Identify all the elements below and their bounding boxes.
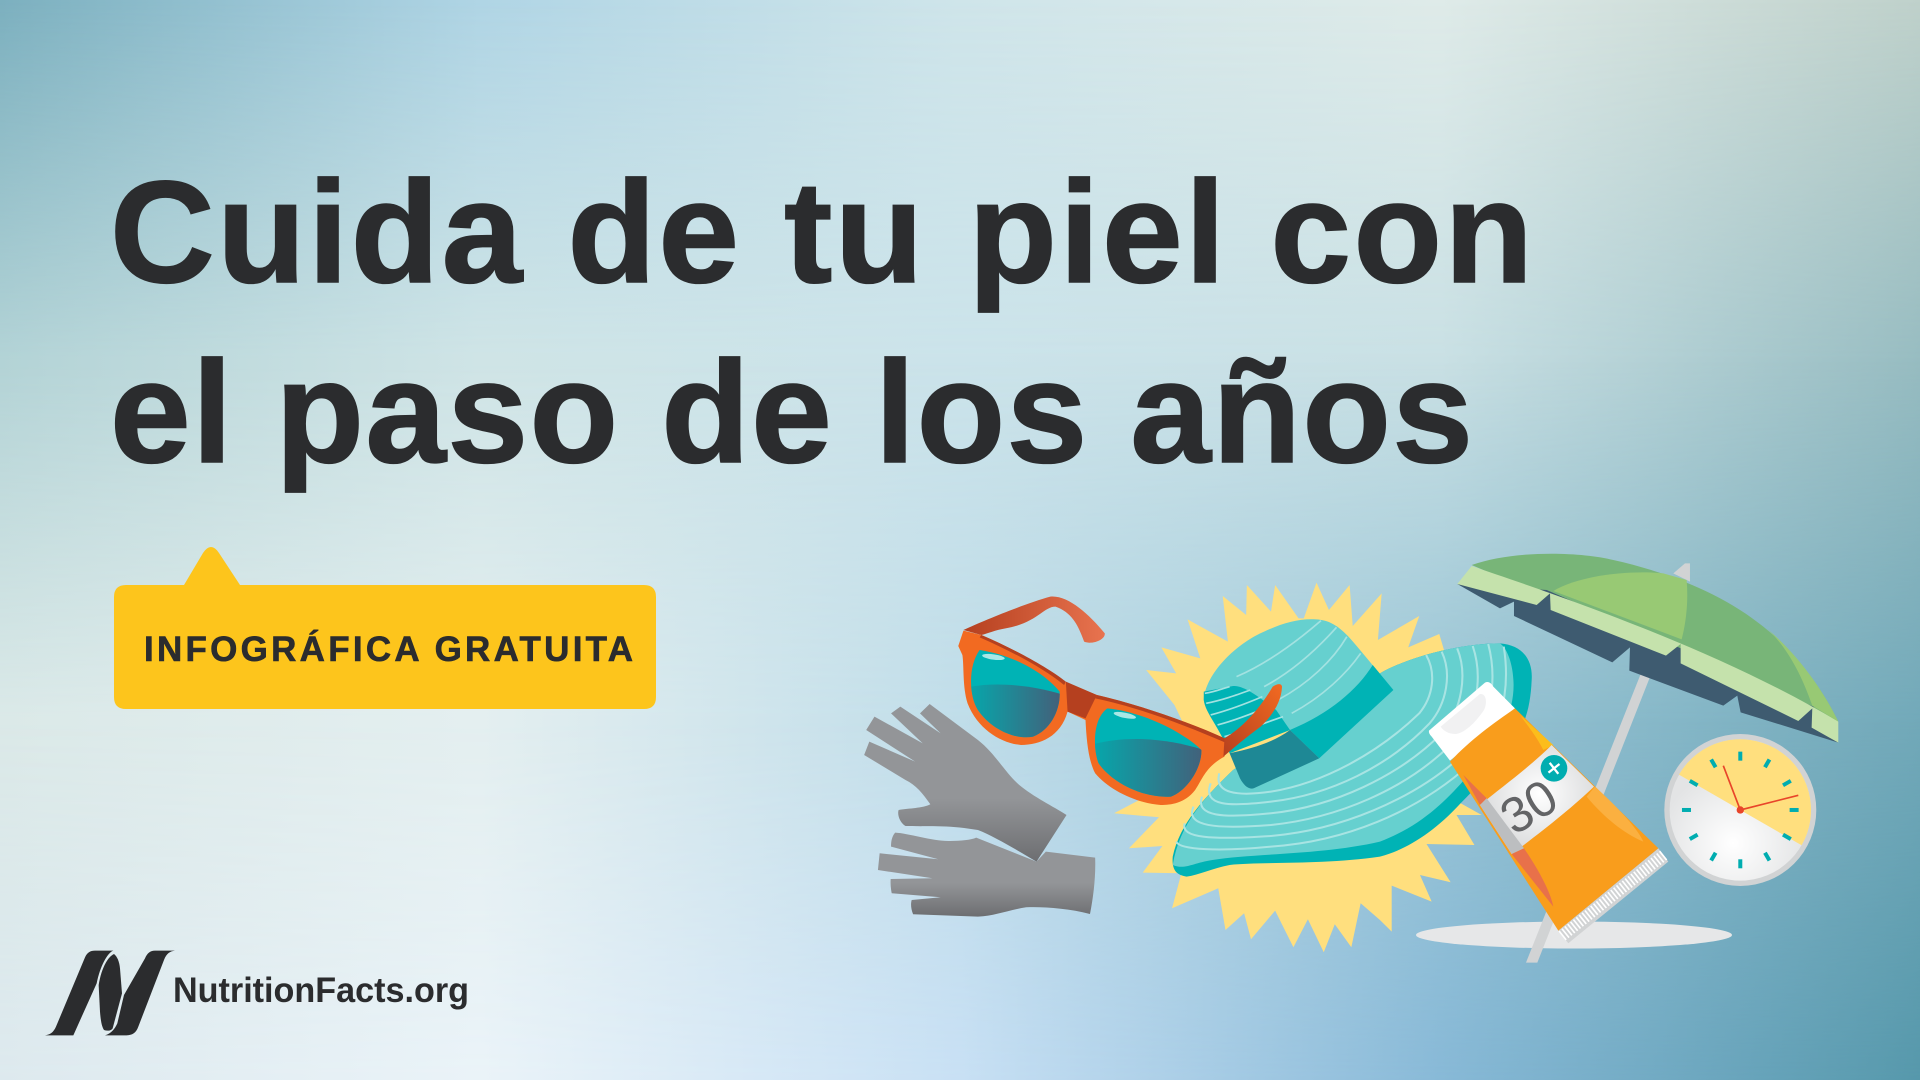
illustration: clock: [1664, 734, 1816, 886]
illustration: sun hat: [1173, 619, 1532, 877]
badge: infografica gratuita: INFOGRÁFICA GRATUITA: [144, 629, 633, 669]
illustration: beach umbrella: [1457, 554, 1838, 963]
badge: infografica gratuita: [114, 547, 656, 709]
logo: NutritionFacts.org: [45, 951, 469, 1035]
title: Cuida de tu piel con: [110, 151, 1533, 313]
logo: NutritionFacts.org: NutritionFacts.org: [173, 971, 469, 1010]
illustration: sunscreen tube SPF 30+: 30: [1490, 768, 1567, 845]
shadow under items: [1416, 922, 1732, 948]
illustration: sunscreen tube SPF 30+: [1429, 682, 1668, 943]
illustration: sunburst: [1114, 583, 1482, 952]
title: el paso de los años: [110, 331, 1473, 493]
illustration: sunglasses: [958, 597, 1282, 805]
illustration: gloves: [864, 704, 1095, 917]
title: [110, 151, 1533, 493]
